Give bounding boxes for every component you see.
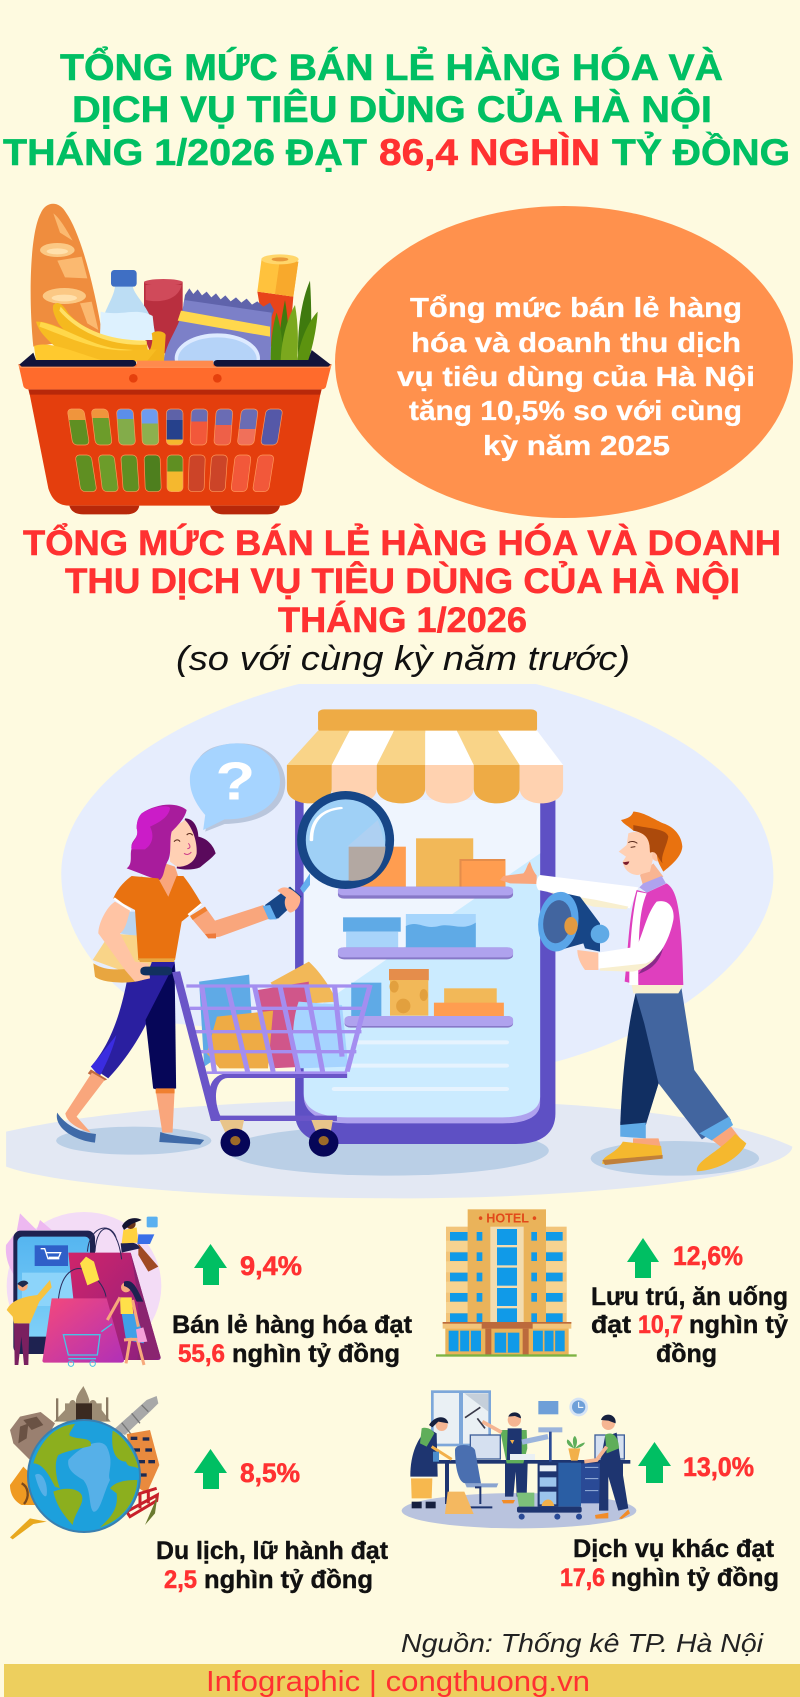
woman legs <box>57 962 204 1145</box>
phone storefront <box>295 800 555 1144</box>
leafy greens <box>271 281 318 360</box>
callout: growth ellipse <box>335 206 793 518</box>
stat: accommodation growth: 12,6% <box>673 1241 743 1271</box>
text: tourism value <box>156 1537 389 1594</box>
title <box>3 45 790 173</box>
stat: retail growth: 9,4% <box>240 1251 302 1281</box>
woman upper body <box>93 805 310 983</box>
icon: grocery basket <box>18 204 332 514</box>
hotel sign: • HOTEL • <box>478 1211 537 1225</box>
background blob <box>61 684 773 1062</box>
floor shadows <box>56 1126 759 1176</box>
footer bar <box>4 1664 800 1697</box>
title: THÁNG 1/2026 ĐẠT <box>3 132 367 173</box>
illustration: online shop scene <box>6 684 792 1198</box>
speech bubble: ? <box>215 751 255 811</box>
title: TỔNG MỨC BÁN LẺ HÀNG HÓA VÀ <box>60 45 723 88</box>
canned food <box>144 279 183 353</box>
speech bubble <box>190 743 285 832</box>
man legs <box>602 988 746 1171</box>
heading: retail total: THU DỊCH VỤ TIÊU DÙNG CỦA HÀ NỘI <box>65 561 740 601</box>
bread <box>31 204 103 347</box>
shelf products <box>338 838 513 1028</box>
heading: retail total: THÁNG 1/2026 <box>278 600 527 640</box>
text: tourism value: 2,5 <box>164 1566 197 1594</box>
basket body <box>18 350 332 514</box>
callout: growth ellipse: kỳ năm 2025 <box>483 430 670 461</box>
text: accommodation value: Lưu trú, ăn uống <box>591 1283 788 1311</box>
icon: cleaning services <box>402 1392 636 1528</box>
arrow: retail up <box>194 1244 227 1285</box>
landmarks behind globe <box>10 1386 159 1539</box>
text: retail value: nghìn tỷ đồng <box>232 1340 400 1368</box>
text: retail value <box>172 1311 413 1368</box>
arrow: tourism up <box>194 1449 227 1489</box>
text: other services value: nghìn tỷ đồng <box>611 1564 779 1592</box>
title: 86,4 NGHÌN <box>379 132 600 173</box>
callout: growth ellipse: vụ tiêu dùng của Hà Nội <box>397 361 755 392</box>
heading: retail total: TỔNG MỨC BÁN LẺ HÀNG HÓA VÀ DOANH <box>23 523 781 563</box>
icon: globe and landmarks <box>10 1386 159 1539</box>
man upper body <box>500 812 683 993</box>
callout: growth ellipse: tăng 10,5% so với cùng <box>409 395 742 426</box>
snack bag <box>163 288 274 383</box>
text: accommodation value: 10,7 <box>638 1311 683 1339</box>
cart glyph <box>41 1249 61 1259</box>
text: tourism value: Du lịch, lữ hành đạt <box>156 1537 389 1565</box>
source note: Nguồn: Thống kê TP. Hà Nội <box>401 1628 764 1658</box>
text: tourism value: nghìn tỷ đồng <box>204 1566 373 1594</box>
icon: shopping people <box>6 1212 161 1366</box>
subheading: (so với cùng kỳ năm trước) <box>176 640 630 678</box>
callout: growth ellipse: hóa và doanh thu dịch <box>411 327 741 358</box>
heading: retail total <box>23 523 781 640</box>
text: retail value: 55,6 <box>178 1340 225 1368</box>
icon: hotel <box>436 1209 577 1357</box>
shopping cart <box>140 962 370 1157</box>
text: accommodation value: đồng <box>656 1340 717 1368</box>
text: other services value: Dịch vụ khác đạt <box>573 1535 775 1563</box>
awning <box>287 709 563 803</box>
stat: other services growth: 13,0% <box>683 1452 754 1482</box>
callout: growth ellipse: Tổng mức bán lẻ hàng <box>410 292 742 323</box>
arrow: accommodation up <box>627 1238 659 1278</box>
text: other services value: 17,6 <box>560 1564 605 1592</box>
text: accommodation value <box>591 1283 788 1368</box>
text: other services value <box>560 1535 779 1592</box>
bananas <box>34 303 166 362</box>
text: accommodation value: đạt <box>591 1311 632 1339</box>
text: retail value: Bán lẻ hàng hóa đạt <box>172 1311 413 1339</box>
stat: tourism growth: 8,5% <box>240 1458 300 1488</box>
title: TỶ ĐỒNG <box>612 131 790 173</box>
yellow roll <box>257 254 299 347</box>
text: accommodation value: nghìn tỷ <box>689 1311 788 1339</box>
title: DỊCH VỤ TIÊU DÙNG CỦA HÀ NỘI <box>72 88 712 130</box>
floor <box>6 1099 792 1198</box>
magnifying glass <box>297 791 394 889</box>
arrow: other services up <box>638 1442 671 1483</box>
bottle <box>100 270 155 340</box>
basket slots <box>67 409 283 492</box>
